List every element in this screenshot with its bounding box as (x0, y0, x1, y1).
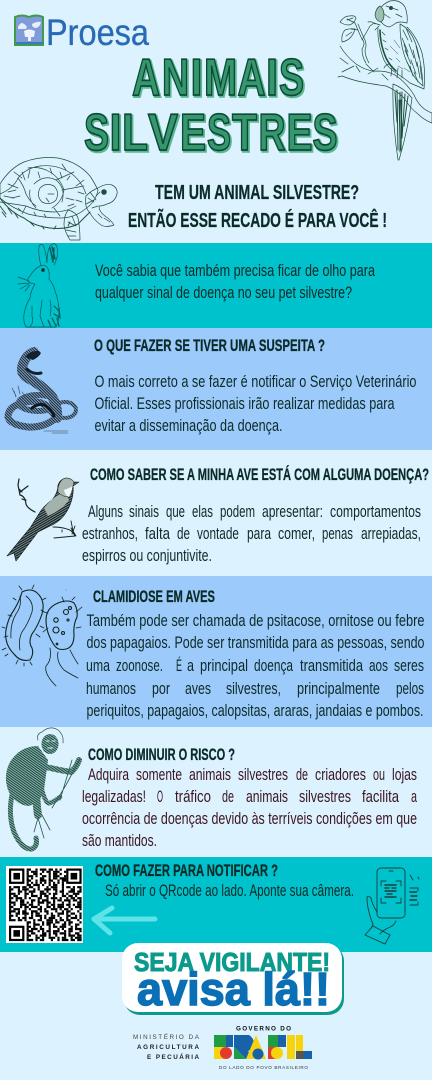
body text: principalmente (297, 680, 380, 698)
logo: Ministério da Agricultura e Pecuária: AGRICULTURA (137, 1044, 199, 1051)
body text: apresentar: (262, 503, 323, 521)
text: how to know if bird is ill (82, 465, 429, 565)
body text: aos (369, 657, 388, 675)
icon: monkey (6, 728, 80, 849)
body text: por (152, 680, 170, 698)
heading: intro text (95, 262, 376, 302)
body text: facilita (362, 788, 400, 806)
logo: Governo do Brasil: GOVERNO DO (236, 1026, 291, 1032)
icon: turtle (0, 158, 117, 240)
body text: principal (200, 657, 248, 675)
body text: humanos (86, 680, 136, 698)
logo: Ministério da Agricultura e Pecuária: E PECUÁRIA (147, 1052, 199, 1061)
title: M (205, 51, 238, 109)
subtitle (128, 182, 387, 232)
heading: COMO FAZER PARA NOTIFICAR ? (95, 862, 278, 880)
text: what to do if suspicion (94, 337, 416, 435)
body text (86, 612, 424, 720)
text: how to notify (95, 862, 354, 900)
body text: animais (246, 788, 288, 806)
body text: silvestres (299, 788, 351, 806)
icon: cobra (8, 351, 76, 433)
title: A (133, 51, 161, 109)
title: N (162, 49, 189, 107)
logo: Governo do Brasil: DO LADO DO POVO BRASILEIRO (219, 1065, 308, 1070)
title: N (163, 51, 190, 109)
title: I (266, 49, 278, 107)
body text: evitar a disseminação da doença. (94, 417, 282, 435)
body text: silvestres, (226, 680, 281, 698)
title: E (181, 106, 207, 164)
body text (82, 503, 421, 565)
body text: Alguns (88, 503, 123, 521)
body text: aves (185, 680, 211, 698)
body text: a (411, 788, 418, 806)
icon: bacteria (2, 585, 82, 686)
title: E (180, 104, 206, 162)
title: I (267, 51, 279, 109)
title: R (258, 104, 286, 162)
body text: estranhos, (82, 525, 138, 543)
heading: COMO DIMINUIR O RISCO ? (88, 746, 235, 764)
title: T (232, 104, 257, 162)
body text: ou (373, 766, 385, 784)
body text: comer, (278, 525, 315, 543)
body text: lojas (392, 766, 417, 784)
QR code (6, 866, 83, 943)
logo: Ministério da Agricultura e Pecuária: MINISTÉRIO DA (133, 1032, 200, 1041)
title: S (84, 104, 109, 162)
title: L (122, 104, 148, 162)
body text: penas (322, 525, 353, 543)
title: R (260, 106, 287, 164)
logo: Proesa (15, 12, 149, 53)
title: S (312, 104, 338, 162)
title (84, 49, 339, 164)
banner: seja vigilante: avisa lá!! (137, 963, 330, 1015)
title: I (110, 104, 122, 162)
title: E (288, 106, 314, 164)
arrow: points to QR code (94, 908, 155, 933)
banner: seja vigilante: SEJA VIGILANTE! (134, 949, 330, 977)
body text (82, 766, 418, 850)
title: S (85, 106, 110, 164)
icon: hand scanning QR code (365, 868, 419, 944)
body text: a (187, 657, 195, 675)
logo: Ministério da Agricultura e Pecuária (133, 1032, 200, 1061)
title: A (239, 51, 267, 109)
body text: espirros ou conjuntivite. (82, 547, 212, 565)
body text: para (247, 525, 272, 543)
title: S (208, 106, 232, 164)
title: E (286, 104, 312, 162)
text: chlamydiosis in birds (86, 588, 424, 720)
body text: Adquira (88, 766, 130, 784)
title: S (314, 106, 339, 164)
body text: elas (192, 503, 213, 521)
body text: legalizadas! (82, 788, 146, 806)
logo: Proesa: Proesa (46, 12, 149, 53)
title: S (279, 49, 304, 107)
title: T (233, 106, 259, 164)
body text: transmitida (300, 657, 364, 675)
body text: criadores (315, 766, 366, 784)
body text: que (166, 503, 185, 521)
body text: sinais (129, 503, 159, 521)
body text: doença (254, 657, 294, 675)
body text: animais (189, 766, 231, 784)
body text: de (177, 525, 190, 543)
title: I (190, 49, 202, 107)
body text: uma (86, 657, 111, 675)
panel: suspicion band (0, 328, 432, 450)
body text: somente (136, 766, 182, 784)
panel: chlamydiosis band (0, 576, 432, 727)
title: V (149, 106, 180, 164)
panel: teal intro band (0, 243, 432, 328)
title: A (132, 49, 160, 107)
body text: zoonose. (116, 657, 163, 675)
title: I (111, 106, 123, 164)
heading: intro text: qualquer sinal de doença no seu pet silvestre? (95, 284, 352, 302)
body text: são mantidos. (82, 832, 157, 850)
title: I (192, 51, 204, 109)
text: how to reduce the risk (82, 746, 418, 850)
icon: small bird (7, 478, 79, 561)
heading: CLAMIDIOSE EM AVES (93, 588, 215, 606)
body text: tráfico (175, 788, 211, 806)
body text: É (176, 656, 182, 675)
body text: vontade (197, 525, 239, 543)
title: A (238, 49, 266, 107)
panel: notify band (0, 857, 432, 952)
title: L (123, 106, 149, 164)
icon: rabbit (18, 244, 60, 327)
icon: parrot (338, 1, 432, 160)
body text: podem (220, 503, 255, 521)
heading: O QUE FAZER SE TIVER UMA SUSPEITA ? (94, 337, 325, 355)
body text: O (157, 788, 163, 806)
body text (94, 373, 416, 435)
body text: falta (145, 525, 171, 543)
title: S (207, 104, 231, 162)
title: V (148, 104, 178, 162)
body text: silvestres (238, 766, 288, 784)
banner: seja vigilante (122, 943, 344, 1015)
title: S (280, 51, 305, 109)
title: M (204, 49, 237, 107)
logo: Governo do Brasil (214, 1026, 312, 1070)
body text: de (222, 788, 234, 806)
body text: de (296, 766, 308, 784)
